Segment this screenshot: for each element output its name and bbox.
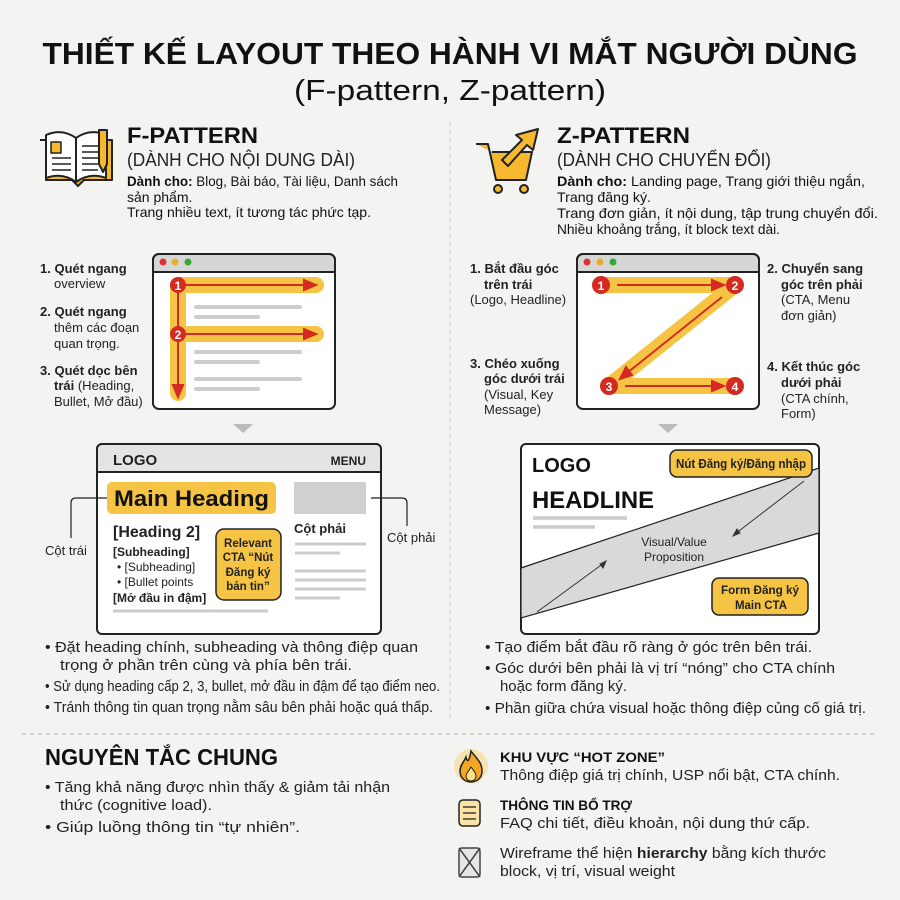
F steps labels: overview (54, 276, 106, 291)
heading: Z-pattern: Z-PATTERN (557, 123, 690, 148)
heading: Nguyên tắc chung: NGUYÊN TẮC CHUNG (45, 743, 278, 770)
F bullets: • Tránh thông tin quan trọng nằm sâu bên phải hoặc quá thấp. (45, 699, 433, 716)
F wireframe: LOGO (113, 452, 157, 469)
Z wireframe: Form Đăng ký (721, 583, 799, 597)
F bullets: • Đặt heading chính, subheading và thông điệp quan (45, 640, 418, 656)
heading: Nguyên tắc chung: • Giúp luồng thông tin “tự nhiên”. (45, 819, 300, 836)
Z steps labels: 4. Kết thúc góc (767, 359, 860, 374)
Z steps labels: (CTA, Menu (781, 292, 850, 307)
heading: Z-pattern: Trang đơn giản, ít nội dung, tập trung chuyển đổi. (557, 205, 878, 221)
Z steps labels: đơn giản) (781, 308, 837, 323)
F browser diagram: 1 (175, 279, 182, 293)
label: Cột trái (45, 498, 107, 558)
F wireframe: Relevant (224, 538, 272, 550)
text: hot zone: Thông điệp giá trị chính, USP nổi bật, CTA chính. (500, 767, 840, 784)
Z bullets: • Tạo điểm bắt đầu rõ ràng ở góc trên bên trái. (485, 639, 812, 656)
Z steps labels: 3. Chéo xuống (470, 356, 560, 371)
icon: cart with arrow (476, 129, 538, 193)
text: thông tin bổ trợ: FAQ chi tiết, điều khoản, nội dung thứ cấp. (500, 815, 810, 832)
Z bullets: hoặc form đăng ký. (500, 679, 627, 695)
Z bullets (485, 639, 866, 717)
heading: F-pattern: (DÀNH CHO NỘI DUNG DÀI) (127, 149, 355, 170)
Z bullets: • Góc dưới bên phải là vị trí “nóng” cho CTA chính (485, 661, 835, 677)
Z wireframe: HEADLINE (532, 487, 654, 514)
F steps labels: thêm các đoạn (54, 320, 139, 335)
F browser diagram: 2 (175, 328, 182, 342)
Z steps labels: góc dưới trái (484, 371, 565, 386)
F browser diagram (153, 254, 335, 409)
title: (F-pattern, Z-pattern) (294, 75, 606, 107)
Z wireframe: Proposition (644, 550, 704, 564)
text: wireframe hierarchy (500, 845, 827, 880)
F bullets (45, 640, 440, 716)
Z steps labels: Form) (781, 406, 816, 421)
F wireframe: Main Heading (114, 486, 269, 511)
heading: Nguyên tắc chung (45, 743, 390, 836)
heading: Z-pattern: Trang đăng ký. (557, 189, 651, 205)
F bullets: • Sử dụng heading cấp 2, 3, bullet, mở đầu in đậm để tạo điểm neo. (45, 679, 440, 695)
Z steps labels: (Visual, Key (484, 387, 554, 402)
text: thông tin bổ trợ: THÔNG TIN BỔ TRỢ (500, 796, 632, 813)
Z browser diagram: 4 (732, 380, 739, 394)
Z steps labels: góc trên phải (781, 277, 863, 292)
Z browser diagram: 1 (598, 279, 605, 293)
F wireframe: Đăng ký (226, 567, 271, 579)
icon: open book (40, 130, 112, 186)
F wireframe: CTA “Nút (223, 552, 273, 564)
icon: list (459, 800, 480, 826)
F steps labels: 2. Quét ngang (40, 304, 127, 319)
F wireframe (97, 444, 381, 634)
Z steps labels: 2. Chuyển sang (767, 261, 863, 276)
F steps labels: 3. Quét dọc bên (40, 363, 138, 378)
F steps labels: Bullet, Mở đầu) (54, 394, 143, 409)
icon: fire (454, 749, 488, 783)
Z steps labels: Message) (484, 402, 541, 417)
heading: F-pattern (127, 123, 398, 220)
heading: F-pattern: Dành cho: Blog, Bài báo, Tài liệu, Danh sách (127, 173, 398, 189)
F steps labels: quan trọng. (54, 336, 120, 351)
Z steps labels: trên trái (484, 277, 532, 292)
Z bullets: • Phần giữa chứa visual hoặc thông điệp củng cố giá trị. (485, 701, 866, 717)
Z steps labels: (CTA chính, (781, 391, 849, 406)
text: wireframe hierarchy: Wireframe thể hiện hierarchy bằng kích thước (500, 845, 827, 862)
F wireframe: [Heading 2] (113, 524, 200, 541)
heading: Z-pattern: (DÀNH CHO CHUYỂN ĐỔI) (557, 149, 771, 170)
Z wireframe: LOGO (532, 455, 591, 477)
F wireframe: [Mở đầu in đậm] (113, 591, 206, 605)
heading: F-pattern: Trang nhiều text, ít tương tác phức tạp. (127, 204, 371, 220)
F wireframe: Cột phải (294, 521, 346, 536)
label: Cột phải (371, 498, 436, 545)
F steps labels: 1. Quét ngang (40, 261, 127, 276)
text: thông tin bổ trợ (500, 796, 810, 832)
heading: Z-pattern: Dành cho: Landing page, Trang giới thiệu ngắn, (557, 173, 865, 189)
Z steps labels (470, 261, 863, 421)
F wireframe: bản tin” (226, 581, 270, 593)
Z browser diagram: 3 (606, 380, 613, 394)
F wireframe: • [Subheading] (117, 560, 195, 574)
Z wireframe: Visual/Value (641, 535, 707, 549)
icon: wireframe box (459, 848, 480, 877)
Z browser diagram (577, 254, 759, 409)
Z steps labels: (Logo, Headline) (470, 292, 566, 307)
F wireframe: MENU (331, 454, 366, 468)
title: THIẾT KẾ LAYOUT THEO HÀNH VI MẮT NGƯỜI DÙNG (42, 35, 857, 71)
F wireframe: [Subheading] (113, 545, 190, 559)
Z steps labels: 1. Bắt đầu góc (470, 261, 559, 276)
Z wireframe (521, 444, 819, 634)
heading: Z-pattern (557, 123, 878, 237)
F steps labels: trái (Heading, (54, 378, 134, 393)
Z browser diagram: 2 (732, 279, 739, 293)
F wireframe: • [Bullet points (117, 575, 193, 589)
label: Cột trái: Cột trái (45, 543, 87, 558)
heading: Z-pattern: Nhiều khoảng trắng, ít block text dài. (557, 221, 780, 237)
heading: F-pattern: F-PATTERN (127, 123, 258, 148)
heading: Nguyên tắc chung: • Tăng khả năng được nhìn thấy & giảm tải nhận (45, 779, 390, 796)
heading: F-pattern: sản phẩm. (127, 189, 192, 205)
heading: Nguyên tắc chung: thức (cognitive load). (60, 797, 212, 814)
text: wireframe hierarchy: block, vị trí, visual weight (500, 863, 676, 880)
F steps labels (40, 261, 143, 409)
Z wireframe: Main CTA (735, 598, 787, 612)
Z steps labels: dưới phải (781, 375, 842, 390)
F bullets: trọng ở phần trên cùng và phía bên trái. (60, 658, 352, 674)
label: Cột phải: Cột phải (387, 530, 436, 545)
text: hot zone: KHU VỰC “HOT ZONE” (500, 749, 665, 765)
title (42, 35, 857, 107)
text: hot zone (500, 749, 840, 784)
Z wireframe: Nút Đăng ký/Đăng nhập (676, 457, 806, 471)
